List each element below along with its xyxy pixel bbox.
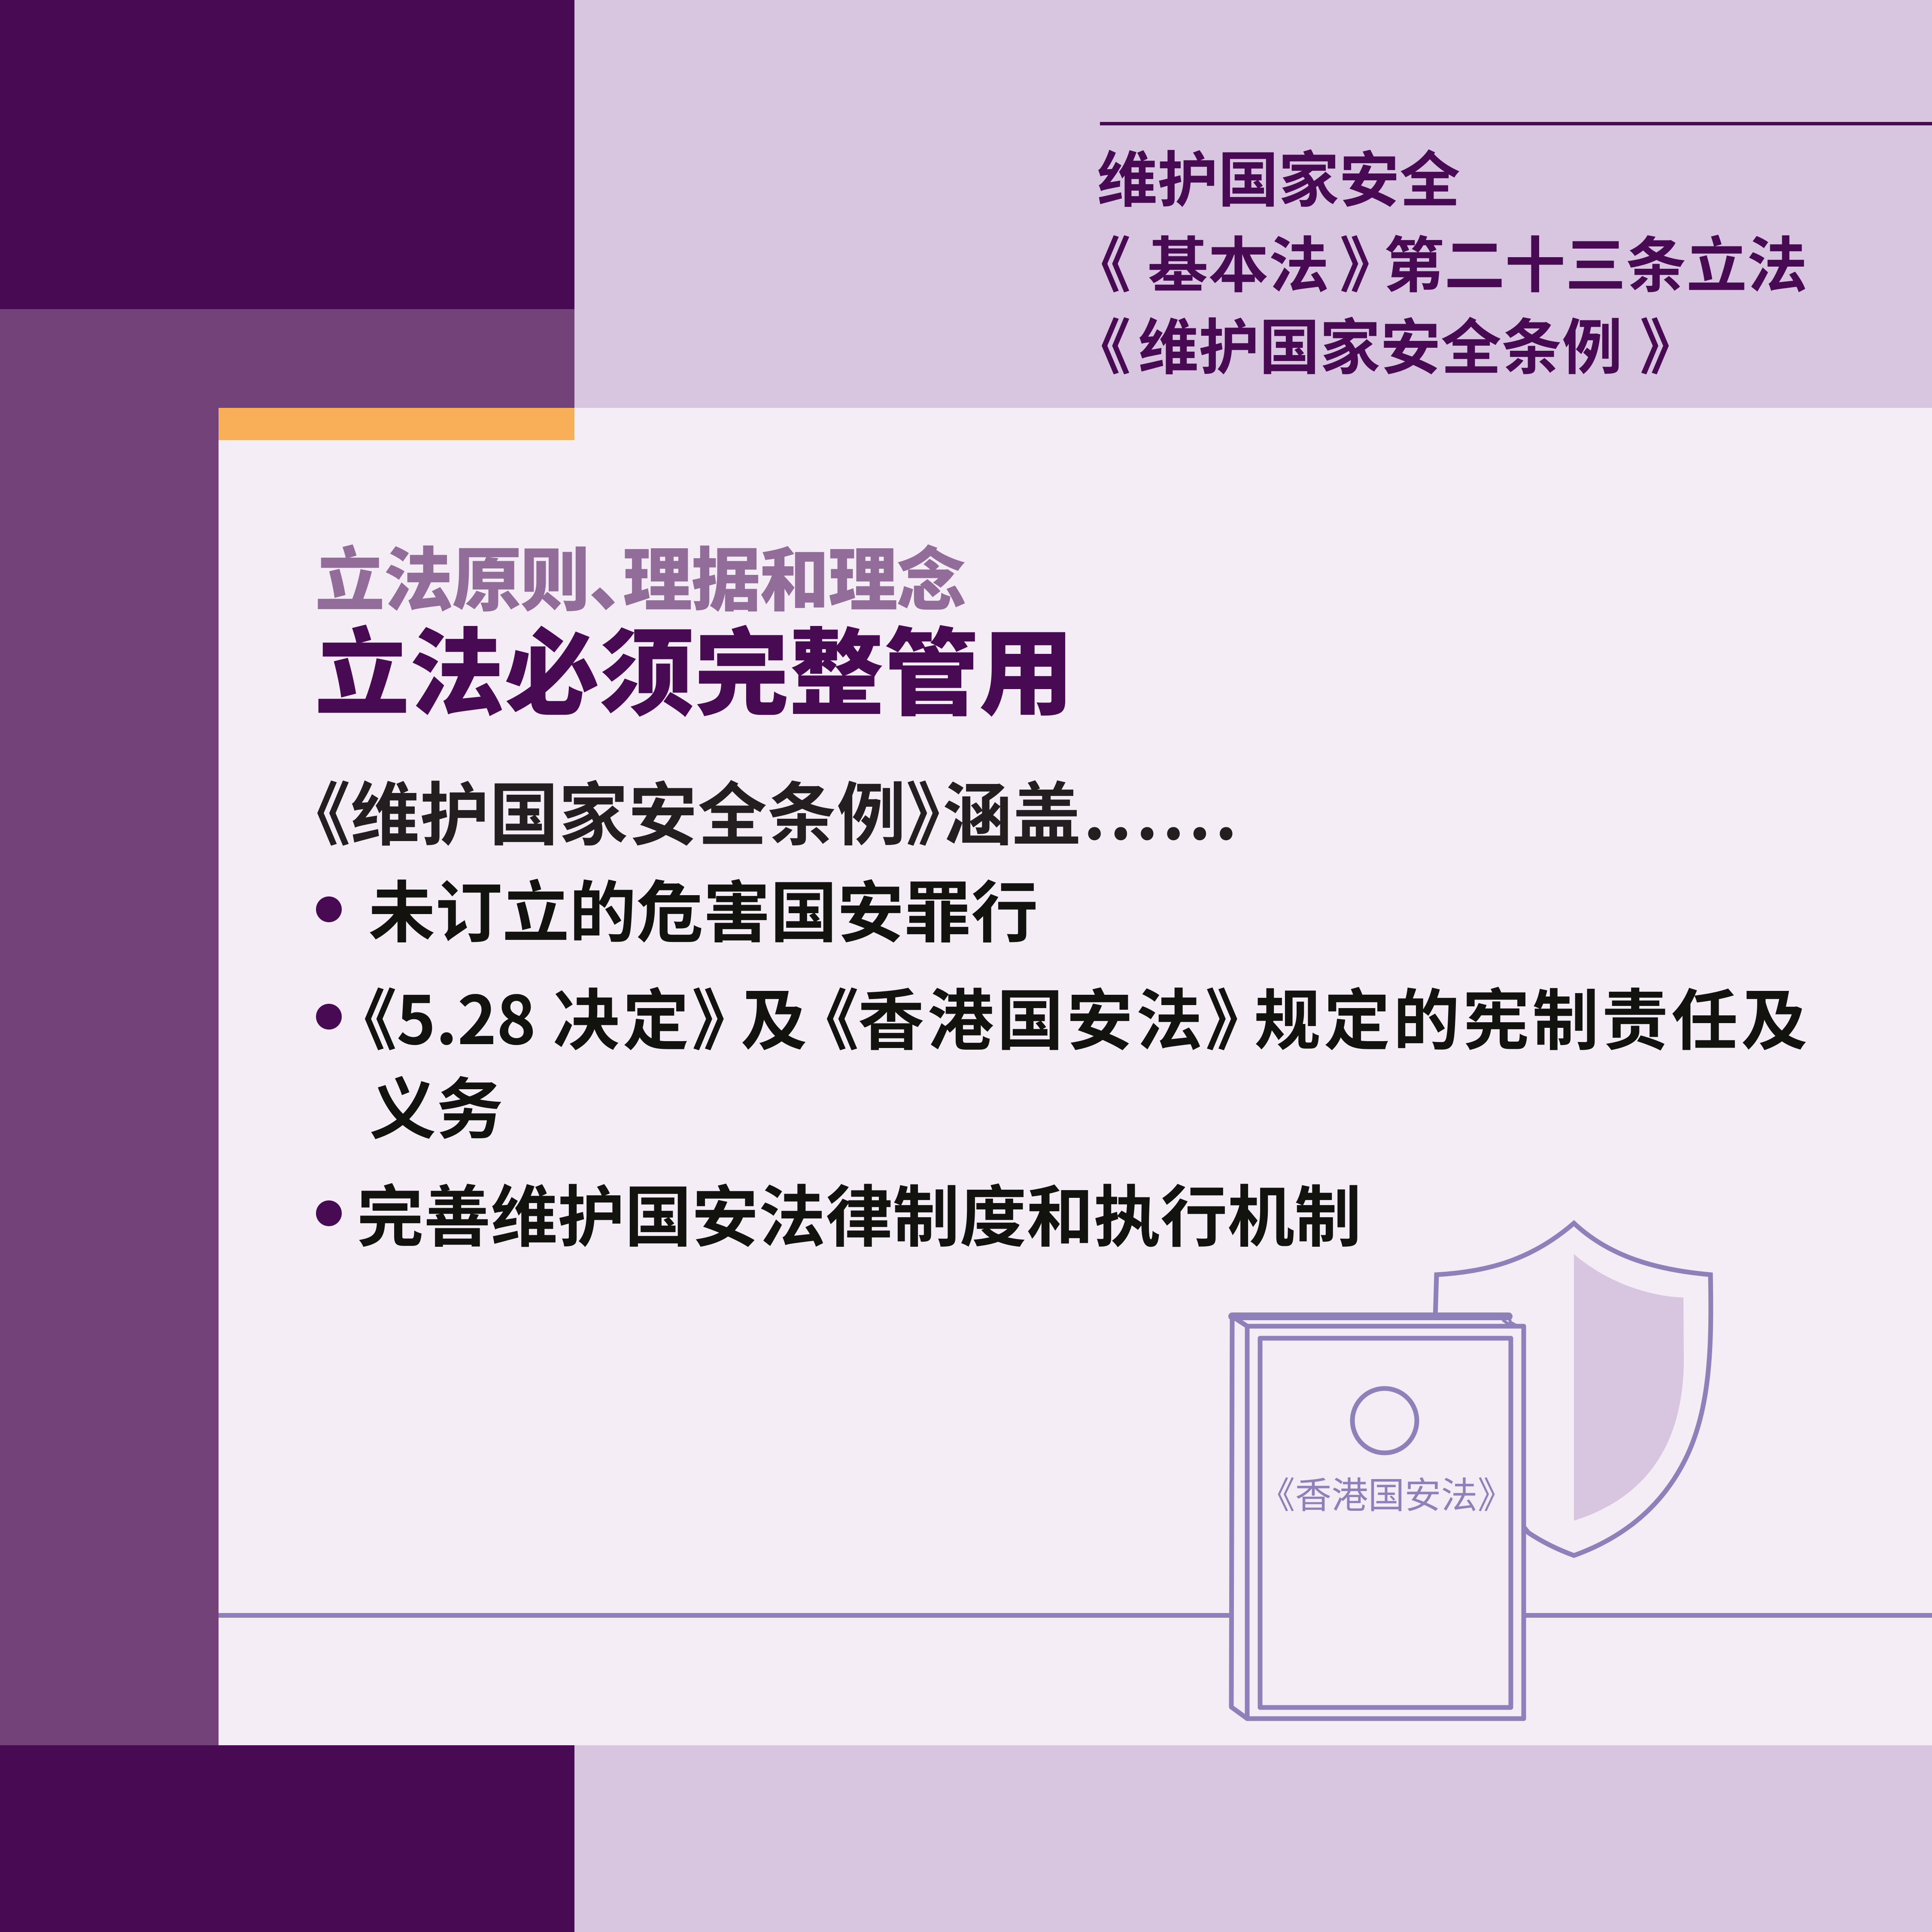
bullet 2 text: 香港国安法》 bbox=[858, 967, 1242, 1063]
bullet list bbox=[316, 876, 1810, 1254]
horizontal ground line bbox=[219, 1613, 1932, 1618]
top rule bbox=[1100, 122, 1932, 125]
title line 2 bbox=[1072, 230, 1814, 291]
title line 2: 基本法 bbox=[1148, 216, 1329, 304]
icon: shield bbox=[1435, 1223, 1711, 1555]
icon: law book bbox=[1231, 1316, 1524, 1719]
bullet 1 text: 未订立的危害国安罪行 bbox=[368, 859, 1038, 956]
main heading: 立法必须完整管用 bbox=[315, 597, 1074, 735]
intro line bbox=[316, 775, 1131, 844]
bullet 2 text: 决定》 bbox=[553, 967, 728, 1063]
bullet 3 text: 完善维护国安法律制度和执行机制 bbox=[357, 1163, 1361, 1260]
panel: top left dark block bbox=[0, 0, 574, 309]
bullet 2 text: 及 bbox=[741, 967, 807, 1063]
bullet 2 text: 《 bbox=[825, 967, 859, 1063]
panel: bottom right lilac block bbox=[574, 1745, 1932, 1932]
bullet 2 continuation: 义务 bbox=[369, 1055, 503, 1152]
title line 3: 》 bbox=[1640, 298, 1700, 386]
panel: left purple column bbox=[0, 408, 219, 1745]
bullet 2 text bbox=[363, 982, 1810, 1049]
title line 1: 维护国家安全 bbox=[1097, 131, 1460, 219]
bullet 1 dot bbox=[316, 896, 342, 922]
title line 2: 》 bbox=[1340, 216, 1400, 304]
panel: mid purple band bbox=[0, 309, 574, 408]
title line 3 bbox=[1072, 312, 1694, 373]
text: ...... bbox=[1083, 759, 1241, 860]
title line 2: 《 bbox=[1070, 216, 1131, 304]
orange accent bar bbox=[219, 408, 574, 440]
bullet 3 dot bbox=[316, 1200, 342, 1226]
title block bbox=[1098, 146, 1811, 378]
intro line: 涵盖 bbox=[943, 759, 1081, 860]
illustration: shield and book bbox=[1202, 1202, 1760, 1760]
title line 3: 维护国家安全条例 bbox=[1138, 298, 1622, 386]
title line 2: 第二十三条立法 bbox=[1384, 216, 1807, 304]
icon: law book: 《香港国安法》 bbox=[1258, 1466, 1514, 1519]
bullet 2 text: 《5.28 bbox=[363, 967, 536, 1063]
bullet 2 dot bbox=[316, 1004, 342, 1030]
intro line: 《维护国家安全条例》 bbox=[316, 759, 941, 860]
bullet 2 text: 规定的宪制责任及 bbox=[1254, 967, 1810, 1063]
panel: top right lilac block bbox=[574, 0, 1932, 408]
title line 3: 《 bbox=[1070, 298, 1131, 386]
subheading: 立法原则、理据和理念 bbox=[315, 524, 965, 625]
panel: bottom left dark block bbox=[0, 1745, 574, 1932]
